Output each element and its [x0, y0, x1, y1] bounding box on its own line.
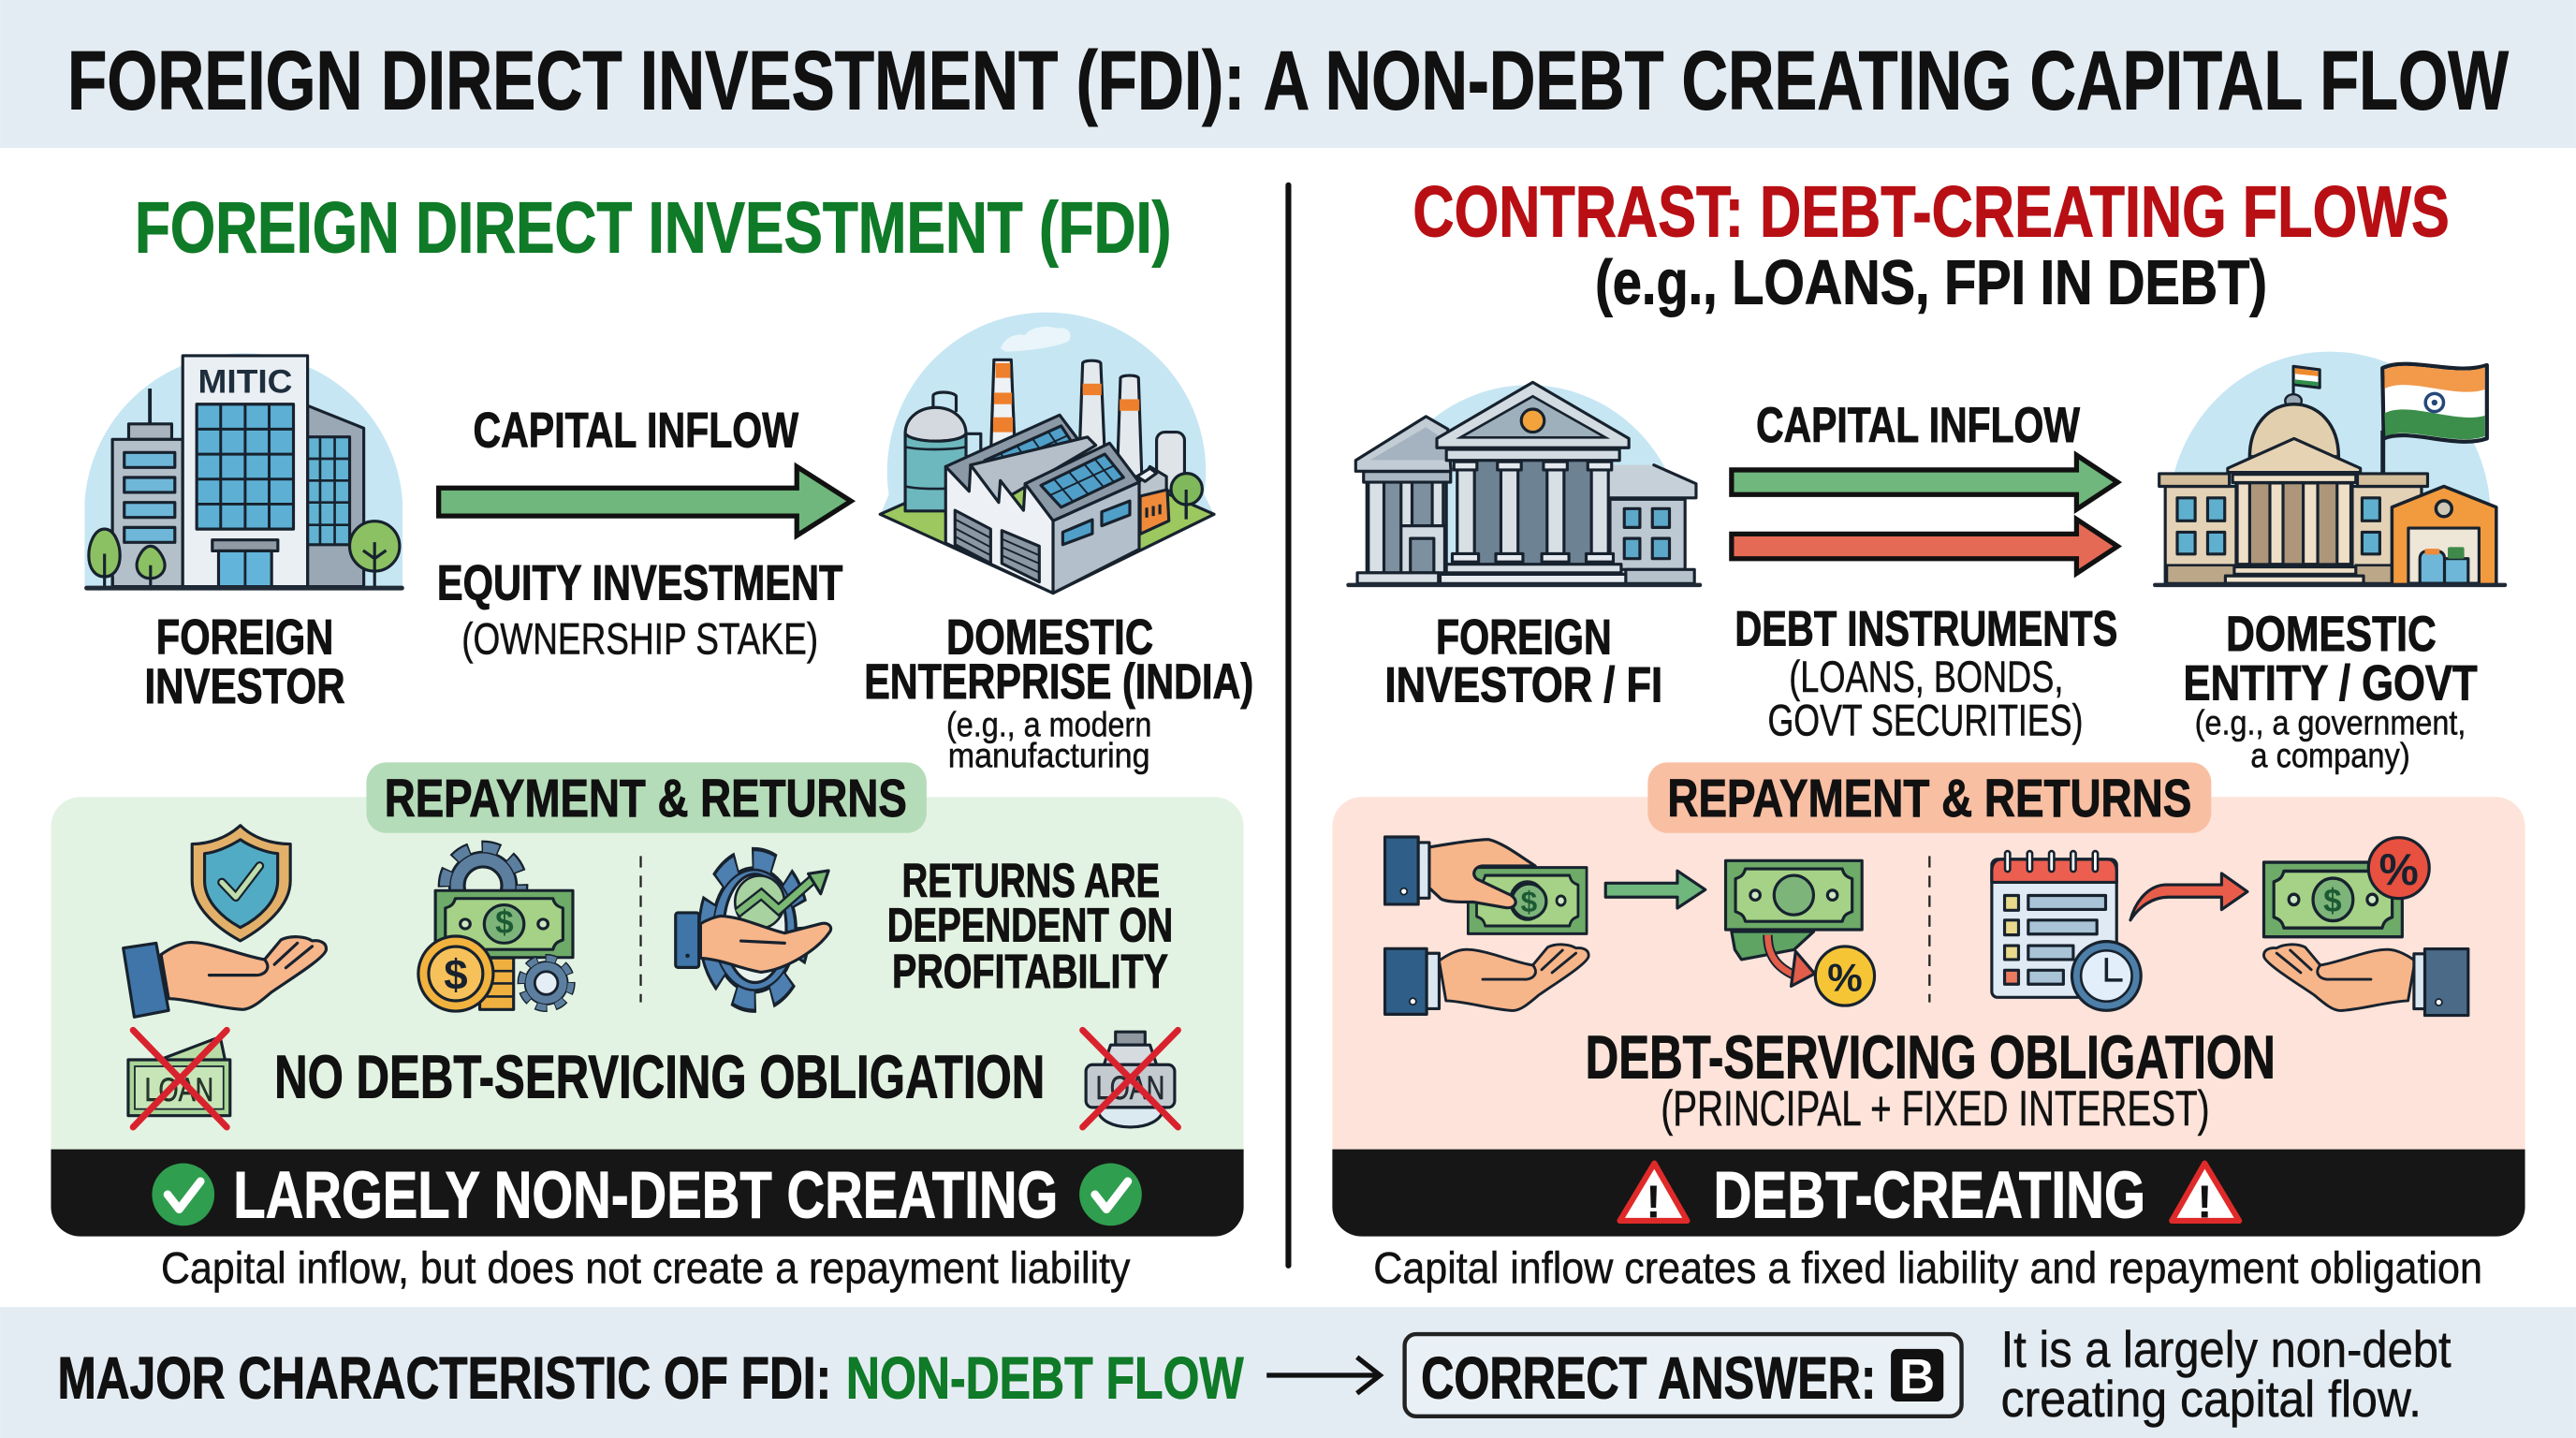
answer explanation: creating capital flow.: [2001, 1371, 2422, 1428]
icon: money with interest coin: [1726, 860, 1875, 1005]
label: instruments list: (LOANS, BONDS,: [1789, 653, 2063, 702]
label: foreign investor / FI: INVESTOR / FI: [1385, 657, 1662, 712]
panel: debt-creating flows (right column): [1332, 172, 2525, 1294]
verdict bar: largely non-debt creating: [51, 1150, 1244, 1237]
badge: repayment and returns: REPAYMENT & RETURNS: [1667, 769, 2191, 828]
panel: FDI (left column): [51, 187, 1253, 1294]
answer explanation: [2001, 1321, 2452, 1428]
dashed separator: [640, 856, 642, 1003]
icon: hands exchanging money: $: [1521, 885, 1538, 918]
label: foreign investor: INVESTOR: [145, 659, 345, 714]
caption: FDI: Capital inflow, but does not create a repayment liability: [161, 1244, 1131, 1294]
heading: FDI: FOREIGN DIRECT INVESTMENT (FDI): [135, 187, 1171, 268]
verdict text: LARGELY NON-DEBT CREATING: [233, 1157, 1058, 1231]
arrow: repayment flow (red): [1732, 520, 2117, 574]
text: returns depend on profitability: [887, 854, 1173, 998]
title: [67, 34, 2509, 127]
label: debt instruments: [1734, 602, 2117, 745]
icon: money, coin and gears: $: [444, 951, 468, 999]
icon: calendar and clock: [1992, 854, 2141, 1010]
icon: check badge left: [152, 1164, 214, 1225]
icon: gear, growth arrow and hand: [676, 859, 831, 1000]
center divider: [1285, 183, 1292, 1269]
label: equity investment: EQUITY INVESTMENT: [437, 556, 842, 611]
note: government or company: (e.g., a government,: [2195, 703, 2466, 741]
icon: crossed-out loan bag: LOAN: [1096, 1070, 1164, 1107]
icon: money, percent and hand: [2263, 838, 2468, 1016]
label: capital inflow: CAPITAL INFLOW: [474, 403, 798, 458]
building sign: MITIC: [198, 363, 292, 400]
icon: warning triangle right: [2172, 1164, 2239, 1227]
icon: money, percent and hand: $: [2323, 883, 2342, 919]
text: returns depend on profitability: PROFITABILITY: [892, 945, 1168, 998]
icon: warning triangle right: !: [2197, 1177, 2212, 1227]
label: domestic entity / govt: DOMESTIC: [2226, 607, 2437, 662]
label: foreign investor: [145, 610, 345, 714]
header band with title: [0, 0, 2576, 148]
icon: warning triangle left: [1620, 1164, 1687, 1227]
dashed separator: [1928, 856, 1930, 1003]
label: foreign investor / FI: FOREIGN: [1436, 610, 1612, 666]
label: domestic enterprise: ENTERPRISE (INDIA): [864, 654, 1253, 710]
note: government or company: [2195, 703, 2466, 775]
verdict bar: debt-creating: [1332, 1150, 2525, 1237]
label: domestic entity / govt: [2183, 607, 2478, 775]
text: principal + fixed interest: (PRINCIPAL + FIXED INTEREST): [1661, 1081, 2210, 1137]
icon: check badge right: [1079, 1164, 1142, 1225]
arrow: red curved: [2130, 873, 2247, 920]
icon: domestic factory: [880, 313, 1214, 594]
text: returns depend on profitability: DEPENDENT ON: [887, 899, 1173, 952]
answer letter: B: [1899, 1349, 1935, 1404]
label: instruments list: [1767, 653, 2083, 745]
answer explanation: It is a largely non-debt: [2001, 1321, 2452, 1378]
footer statement: NON-DEBT FLOW: [846, 1346, 1244, 1412]
text: debt-servicing obligation: [1586, 1022, 2276, 1137]
icon: money, coin and gears: $: [495, 904, 514, 941]
label: foreign investor / FI: [1385, 610, 1662, 712]
label: domestic enterprise: DOMESTIC: [946, 610, 1153, 666]
panel: repayment and returns (green): [51, 762, 1244, 1237]
icon: bank building: [1346, 382, 1702, 587]
subheading: examples: (e.g., LOANS, FPI IN DEBT): [1595, 249, 2267, 318]
icon: crossed-out loan note: [128, 1030, 230, 1127]
answer box: CORRECT ANSWER:: [1421, 1346, 1876, 1412]
icon: crossed-out loan note: LOAN: [145, 1072, 213, 1108]
icon: shield over open hand: [124, 826, 327, 1017]
label: ownership stake: (OWNERSHIP STAKE): [461, 615, 818, 665]
verdict text: DEBT-CREATING: [1714, 1157, 2145, 1231]
icon: hands exchanging money: [1385, 837, 1588, 1014]
icon: money, coin and gears: [418, 847, 573, 1011]
icon: crossed-out loan bag: [1083, 1030, 1178, 1127]
text: returns depend on profitability: RETURNS ARE: [902, 854, 1160, 907]
icon: warning triangle left: !: [1646, 1177, 1661, 1227]
icon: money with interest coin: %: [1827, 955, 1863, 999]
arrow: green transfer: [1605, 871, 1705, 908]
icon: government building with flag: [2153, 352, 2507, 587]
label: capital inflow: CAPITAL INFLOW: [1756, 398, 2080, 453]
arrow: to answer: [1266, 1357, 1380, 1393]
footer band: [0, 1307, 2576, 1438]
label: instruments list: GOVT SECURITIES): [1767, 696, 2083, 745]
note: government or company: a company): [2250, 737, 2410, 775]
badge: repayment and returns: REPAYMENT & RETURNS: [385, 769, 907, 828]
title: FOREIGN DIRECT INVESTMENT (FDI):: [67, 34, 1245, 127]
note: modern manufacturing: [946, 705, 1151, 775]
note: modern manufacturing: (e.g., a modern: [946, 705, 1151, 743]
note: modern manufacturing: manufacturing: [948, 737, 1150, 775]
arrow: capital inflow: [439, 466, 851, 536]
icon: money, percent and hand: %: [2379, 845, 2419, 895]
label: foreign investor: FOREIGN: [156, 610, 333, 666]
text: no debt-servicing obligation: NO DEBT-SERVICING OBLIGATION: [274, 1042, 1045, 1110]
label: domestic enterprise: [864, 610, 1253, 775]
arrow: principal inflow (green): [1732, 455, 2117, 509]
footer statement: MAJOR CHARACTERISTIC OF FDI:: [57, 1346, 831, 1412]
text: debt-servicing obligation: DEBT-SERVICING OBLIGATION: [1586, 1022, 2276, 1091]
heading: contrast: [1412, 172, 2450, 318]
label: equity investment: [437, 556, 842, 665]
caption: debt flows: Capital inflow creates a fixed liability and repayment obligation: [1373, 1244, 2482, 1294]
panel: repayment and returns (red): [1332, 762, 2525, 1237]
label: domestic entity / govt: ENTITY / GOVT: [2183, 656, 2478, 712]
answer letter: [1891, 1349, 1943, 1404]
label: debt instruments: DEBT INSTRUMENTS: [1734, 602, 2117, 657]
icon: foreign investor office building: [84, 353, 404, 591]
